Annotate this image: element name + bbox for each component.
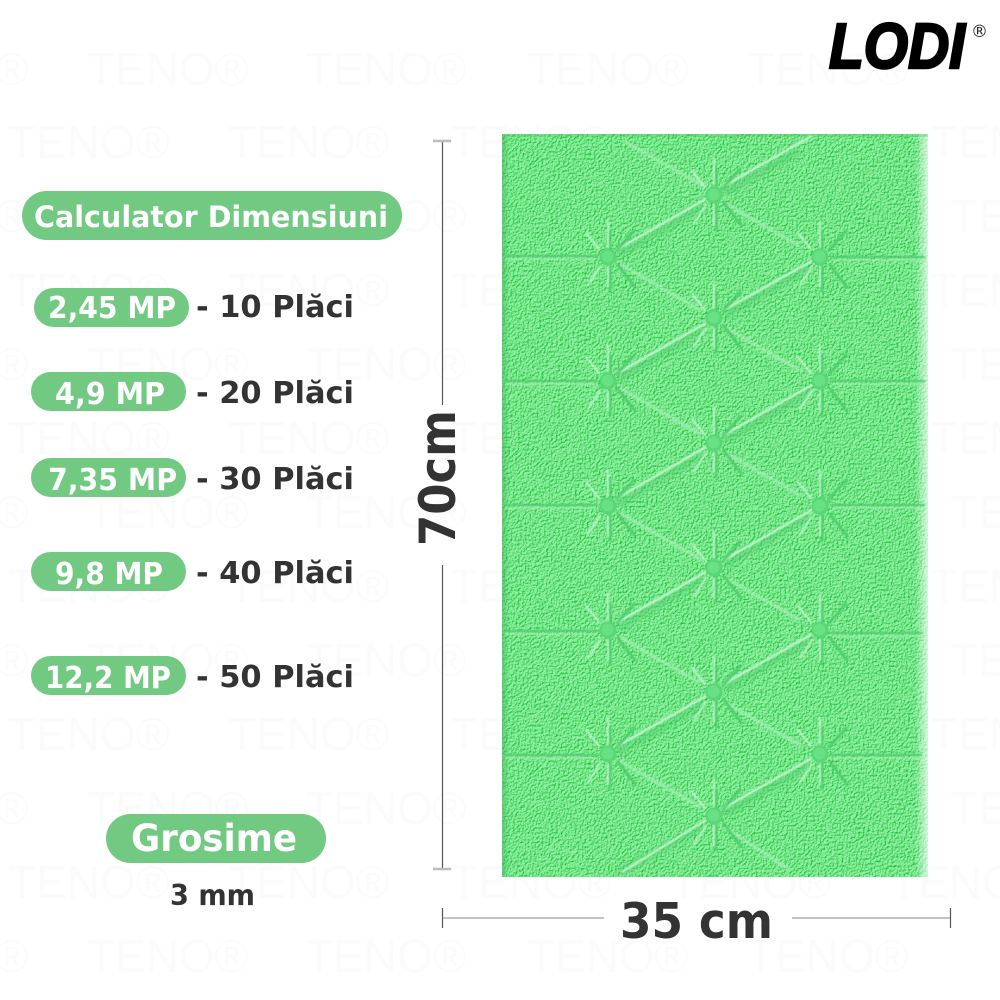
- watermark pattern: TENO®: [228, 708, 390, 760]
- watermark pattern: TENO®: [87, 338, 249, 390]
- watermark pattern: TENO®: [87, 43, 249, 95]
- watermark pattern: TENO®: [87, 190, 249, 242]
- watermark pattern: TENO®: [450, 708, 612, 760]
- watermark pattern: TENO®: [747, 930, 909, 982]
- row: 9,8 MP - 40 Plăci: [31, 552, 354, 592]
- watermark pattern: TENO®: [228, 412, 390, 464]
- watermark pattern: TENO®: [450, 856, 612, 908]
- tile shadows: soft dark seams: [618, 150, 810, 873]
- watermark pattern: TENO®: [305, 43, 467, 95]
- watermark pattern: TENO®: [8, 708, 170, 760]
- tile ridges: bright fold lines: [616, 136, 812, 872]
- tile ridges: faint horizontal highlights: [505, 259, 925, 758]
- logo: LODI: LODI: [829, 10, 966, 82]
- row: 7,35 MP - 30 Plăci: - 30 Plăci: [196, 462, 354, 497]
- watermark pattern: TENO®: [450, 560, 612, 612]
- row: 7,35 MP - 30 Plăci: [31, 458, 354, 498]
- height dimension line: [433, 141, 451, 869]
- watermark pattern: TENO®: [228, 264, 390, 316]
- watermark pattern: TENO®: [228, 856, 390, 908]
- watermark pattern: TENO®: [87, 930, 249, 982]
- watermark pattern: TENO®: [8, 856, 170, 908]
- watermark pattern: TENO®: [670, 856, 832, 908]
- row: 12,2 MP - 50 Plăci: 12,2 MP: [45, 661, 171, 696]
- tile ridges: soft descending folds: [620, 142, 800, 870]
- row: 2,45 MP - 10 Plăci: [34, 288, 354, 327]
- watermark pattern: TENO®: [87, 782, 249, 834]
- watermark pattern: TENO®: [305, 930, 467, 982]
- watermark pattern: TENO®: [8, 264, 170, 316]
- row: 4,9 MP - 20 Plăci: 4,9 MP: [55, 377, 165, 412]
- row: 4,9 MP - 20 Plăci: [31, 372, 354, 412]
- watermark pattern: TENO®: [8, 560, 170, 612]
- row: 2,45 MP - 10 Plăci: - 10 Plăci: [196, 290, 354, 325]
- row: 9,8 MP - 40 Plăci: 9,8 MP: [55, 557, 163, 592]
- width dimension line: [442, 908, 950, 928]
- watermark pattern: TENO®: [527, 43, 689, 95]
- watermark pattern: TENO®: [450, 412, 612, 464]
- heading pill: Calculator Dimensiuni: [22, 191, 402, 240]
- watermark pattern: TENO®: [228, 116, 390, 168]
- watermark pattern: TENO®: [87, 486, 249, 538]
- watermark pattern: TENO®: [305, 190, 467, 242]
- watermark pattern: TENO®: [305, 338, 467, 390]
- watermark pattern: TENO®: [527, 930, 689, 982]
- watermark pattern: TENO®: [8, 412, 170, 464]
- watermark pattern: TENO®: [305, 486, 467, 538]
- heading pill: Calculator Dimensiuni: Calculator Dimensiuni: [34, 200, 388, 234]
- thickness pill: Grosime: [106, 814, 326, 863]
- row: 9,8 MP - 40 Plăci: - 40 Plăci: [196, 556, 354, 591]
- row: 12,2 MP - 50 Plăci: - 50 Plăci: [196, 660, 354, 695]
- watermark pattern: TENO®: [228, 560, 390, 612]
- row: 12,2 MP - 50 Plăci: [31, 656, 354, 696]
- row: 4,9 MP - 20 Plăci: - 20 Plăci: [196, 376, 354, 411]
- height label: 70cm: 70cm: [409, 410, 467, 546]
- panel: green 3D wall tile: [502, 134, 928, 877]
- watermark pattern: TENO®: [305, 782, 467, 834]
- width label: 35 cm: 35 cm: [620, 893, 773, 950]
- watermark pattern: TENO®: [450, 264, 612, 316]
- row: 2,45 MP - 10 Plăci: 2,45 MP: [48, 291, 176, 326]
- thickness pill: Grosime: Grosime: [131, 817, 297, 860]
- watermark pattern: TENO®: [8, 116, 170, 168]
- row: 7,35 MP - 30 Plăci: 7,35 MP: [48, 463, 177, 498]
- tile ridges: dark fold lines: [505, 256, 925, 755]
- watermark pattern: TENO®: [87, 634, 249, 686]
- thickness value: 3 mm: 3 mm: [170, 879, 255, 912]
- tufted button nodes: [586, 159, 847, 850]
- watermark pattern: TENO®: [747, 43, 909, 95]
- watermark pattern: TENO®: [450, 116, 612, 168]
- watermark pattern: TENO®: [305, 634, 467, 686]
- logo: LODI: ®: [971, 22, 988, 42]
